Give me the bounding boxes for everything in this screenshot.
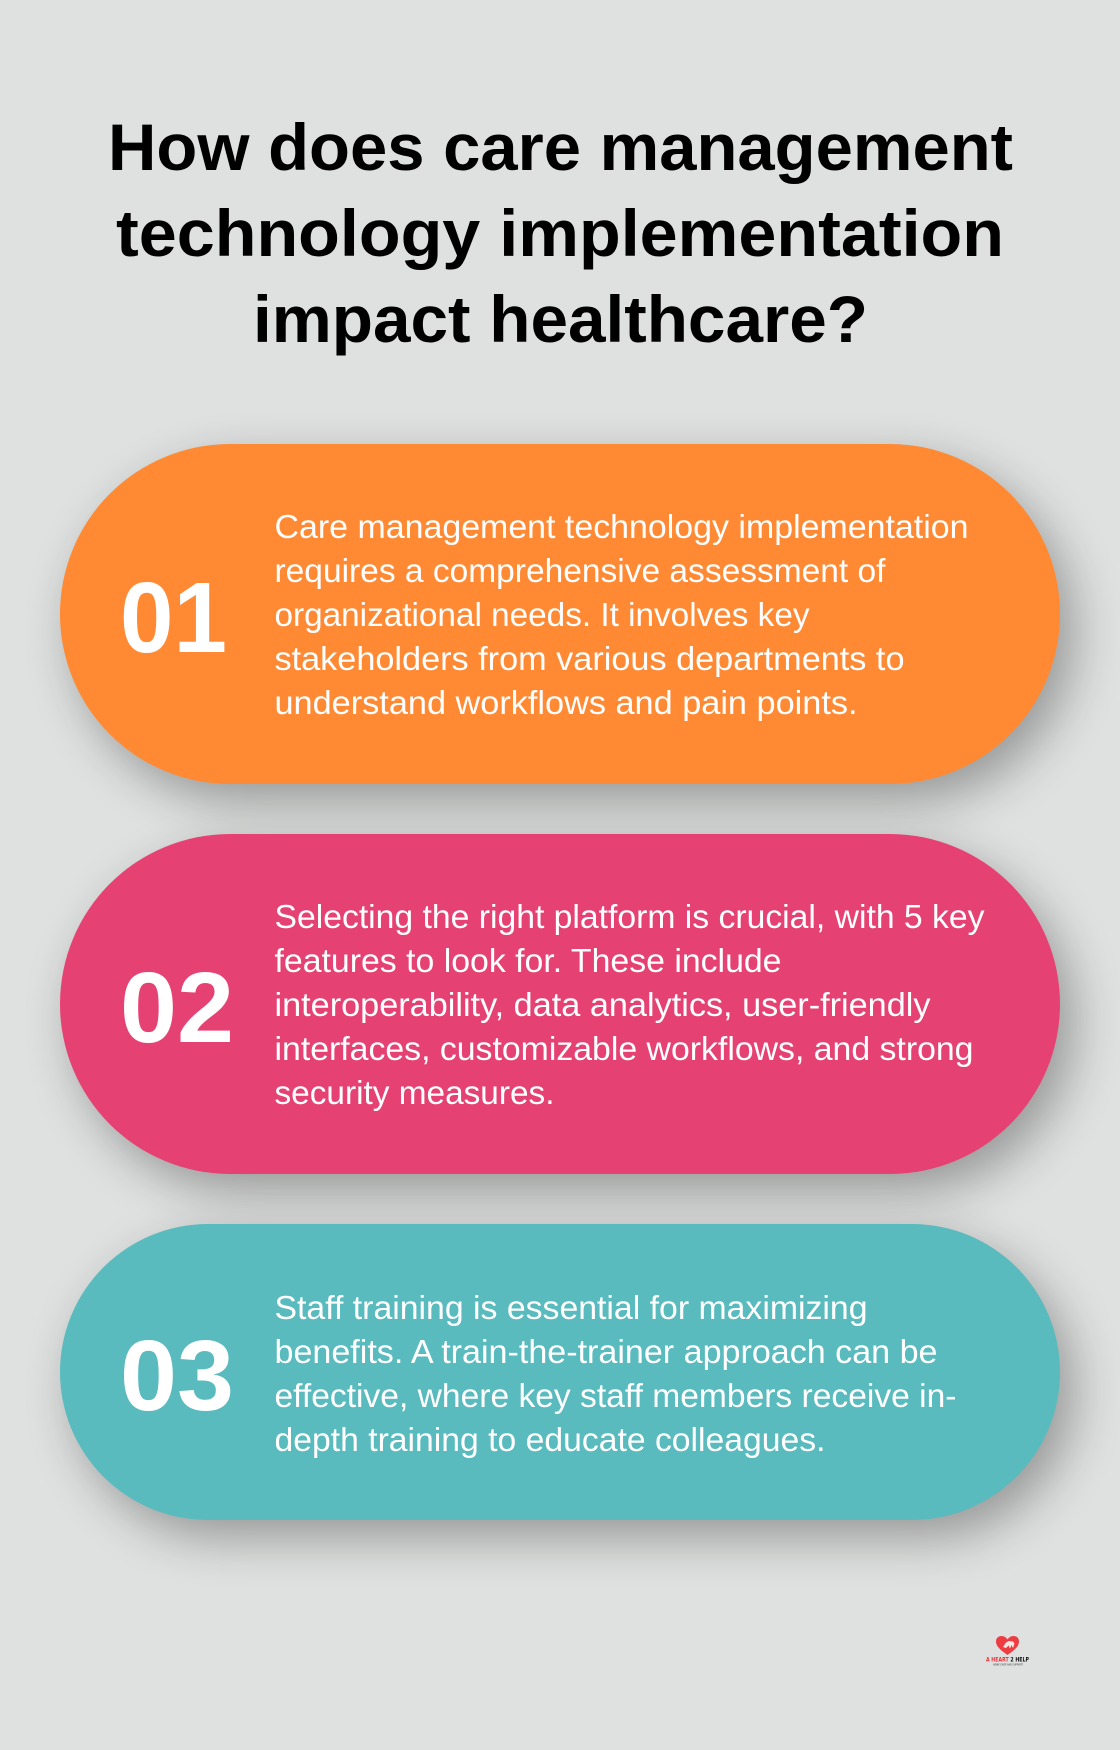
text block: step 03 description: effective, where key staff members receive in- — [274, 1377, 956, 1414]
panel: step 01 — [60, 444, 1060, 784]
text block: step 01 description: requires a comprehensive assessment of — [274, 552, 886, 589]
text block: step 02 description: Selecting the right platform is crucial, with 5 key — [274, 898, 985, 935]
text block: step 03 description — [274, 1289, 956, 1458]
text block: step 01 description: stakeholders from various departments to — [274, 640, 904, 677]
title: impact healthcare? — [253, 282, 868, 356]
text block: step 03 description: benefits. A train-the-trainer approach can be — [274, 1333, 938, 1370]
text block: step 02 description: features to look for. These include — [274, 942, 782, 979]
text block: step 01 description: understand workflows and pain points. — [274, 684, 858, 721]
step number 02: 02 — [120, 952, 234, 1064]
text block: step 02 description: interoperability, data analytics, user-friendly — [274, 986, 931, 1023]
text block: step 01 description: Care management technology implementation — [274, 508, 968, 545]
panel: step 02 — [60, 834, 1060, 1174]
icon: red heart with hand — [996, 1636, 1019, 1655]
text block: step 01 description: organizational needs. It involves key — [274, 596, 810, 633]
logo wordmark: A HEART 2 HELP — [986, 1656, 1029, 1664]
text block: step 03 description: depth training to educate colleagues. — [274, 1421, 826, 1458]
title — [108, 110, 1013, 356]
logo: A Heart 2 Help — [986, 1636, 1029, 1666]
text block: step 01 description — [274, 508, 968, 721]
step number 03: 03 — [120, 1320, 234, 1432]
panel: step 03 — [60, 1224, 1060, 1520]
title: technology implementation — [116, 196, 1004, 270]
text block: step 02 description — [274, 898, 985, 1111]
step number 01: 01 — [120, 562, 227, 674]
text block: step 03 description: Staff training is essential for maximizing — [274, 1289, 868, 1326]
text block: step 02 description: interfaces, customizable workflows, and strong — [274, 1030, 973, 1067]
title: How does care management — [108, 110, 1013, 184]
logo tagline: HOME CARE AND SUPPORT — [993, 1662, 1023, 1666]
text block: step 02 description: security measures. — [274, 1074, 554, 1111]
